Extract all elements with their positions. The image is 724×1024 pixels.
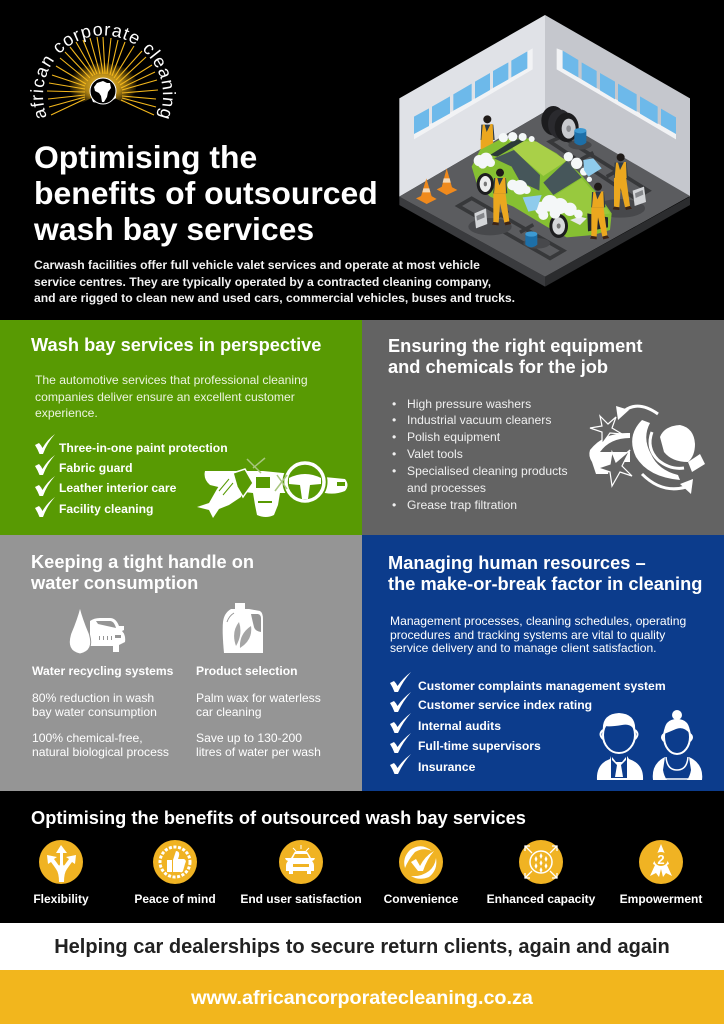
column: product selection: car cleaning: [196, 705, 261, 719]
column: water recycling systems: [32, 664, 173, 759]
label: peace of mind: Peace of mind: [134, 892, 216, 906]
bullet list: Specialised cleaning products: [407, 464, 568, 478]
heading: Keeping a tight handle on: [31, 551, 254, 572]
intro text: [34, 258, 515, 305]
cones: [416, 168, 457, 204]
intro text: service centres. They are typically operated by a contracted cleaning company,: [34, 275, 491, 289]
check list: [35, 434, 228, 517]
icon: end user satisfaction: [279, 840, 323, 884]
icon: polishing machine: [589, 404, 705, 494]
shadows: [468, 140, 645, 249]
title: benefits of outsourced: [34, 175, 378, 211]
illustration: isometric car wash bay: [399, 15, 690, 286]
icon: peace of mind: [153, 840, 197, 884]
icon: eco product bottle: [222, 603, 263, 653]
label: end user satisfaction: End user satisfaction: [240, 892, 362, 906]
bullet list: •: [392, 464, 396, 478]
body text: companies deliver ensure an excellent customer: [35, 390, 295, 404]
icon: hand cleaning dashboard: [197, 458, 348, 518]
floor markings: [458, 137, 648, 258]
title: wash bay services: [34, 211, 314, 247]
panel: right equipment and chemicals: [362, 320, 724, 535]
heading: water consumption: [31, 572, 198, 593]
heading: Optimising the benefits of outsourced wash bay services: [31, 807, 526, 828]
body text: [390, 614, 686, 655]
icon: enhanced capacity: [519, 840, 563, 884]
icon: convenience: [399, 840, 443, 884]
body text: service delivery and to manage client satisfaction.: [390, 641, 657, 655]
worker: front: [590, 183, 609, 239]
body text: The automotive services that professional cleaning: [35, 373, 308, 387]
bullet list: [392, 396, 568, 512]
bucket: [574, 131, 586, 145]
bullet list: Industrial vacuum cleaners: [407, 413, 551, 427]
check list: [390, 672, 666, 774]
intro text: and are rigged to clean new and used cars, commercial vehicles, buses and trucks.: [34, 291, 515, 305]
tyres: [541, 106, 579, 142]
heading: the make-or-break factor in cleaning: [388, 573, 702, 594]
bullet list: •: [392, 498, 396, 512]
machines: [474, 187, 646, 228]
title: [34, 139, 378, 247]
bullet list: Polish equipment: [407, 430, 500, 444]
bullet list: High pressure washers: [407, 396, 531, 410]
icon: empowerment: [639, 840, 683, 884]
check list: Internal audits: [418, 719, 501, 733]
label: enhanced capacity: Enhanced capacity: [487, 892, 595, 906]
bullet list: and processes: [407, 481, 486, 495]
banner: tagline: [0, 923, 724, 970]
body text: procedures and tracking systems are vital to quality: [390, 628, 665, 642]
body text: Management processes, cleaning schedules, operating: [390, 614, 686, 628]
car: [472, 138, 612, 238]
panel: wash bay services in perspective: [0, 320, 362, 535]
column: product selection: Product selection: [196, 664, 297, 678]
heading: and chemicals for the job: [388, 356, 608, 377]
worker: back: [479, 115, 499, 172]
heading: Wash bay services in perspective: [31, 334, 321, 355]
intro text: Carwash facilities offer full vehicle valet services and operate at most vehicle: [34, 258, 480, 272]
right windows: [557, 48, 676, 139]
heading: [31, 551, 254, 593]
body text: experience.: [35, 406, 98, 420]
panel: header: [0, 0, 724, 320]
banner: tagline: Helping car dealerships to secure return clients, again and again: [54, 936, 670, 958]
left windows: [414, 48, 533, 139]
check list: Leather interior care: [59, 481, 176, 495]
label: empowerment: Empowerment: [620, 892, 702, 906]
icon: male and female supervisors: [596, 710, 702, 780]
panel: benefits strip: [0, 791, 724, 923]
check list: Customer complaints management system: [418, 679, 666, 693]
heading: [388, 335, 642, 377]
bullet list: •: [392, 396, 396, 410]
heading: [388, 552, 702, 594]
bullet list: •: [392, 430, 396, 444]
check list: Three-in-one paint protection: [59, 441, 228, 455]
logo: african corporate cleaning: african corporate cleaning: [30, 26, 176, 119]
check list: Fabric guard: [59, 461, 133, 475]
bullet list: Valet tools: [407, 447, 463, 461]
panel: water consumption: [0, 535, 362, 791]
bullet list: •: [392, 413, 396, 427]
worker: right: [613, 153, 632, 210]
column: water recycling systems: natural biological process: [32, 745, 169, 759]
heading: Ensuring the right equipment: [388, 335, 642, 356]
icon: empowerment: 2: [657, 852, 665, 867]
check list: Insurance: [418, 760, 475, 774]
icon: water drop and car: [70, 609, 126, 654]
label: flexibility: Flexibility: [33, 892, 89, 906]
body text: [35, 373, 308, 420]
foam: [474, 132, 592, 220]
title: Optimising the: [34, 139, 257, 175]
check list: Customer service index rating: [418, 698, 592, 712]
icon: flexibility: [39, 840, 83, 884]
label: convenience: Convenience: [384, 892, 458, 906]
check list: Full-time supervisors: [418, 739, 541, 753]
column: product selection: [196, 664, 321, 759]
bullet list: Grease trap filtration: [407, 498, 517, 512]
banner: website: www.africancorporatecleaning.co.za: [191, 987, 533, 1009]
column: product selection: Palm wax for waterless: [196, 691, 321, 705]
column: product selection: litres of water per wash: [196, 745, 321, 759]
column: water recycling systems: 100% chemical-free,: [32, 731, 143, 745]
check list: Facility cleaning: [59, 502, 153, 516]
bullet list: •: [392, 447, 396, 461]
panel: managing human resources: [362, 535, 724, 791]
banner: website: [0, 970, 724, 1024]
column: product selection: Save up to 130-200: [196, 731, 302, 745]
worker: left front: [492, 169, 511, 225]
heading: Managing human resources –: [388, 552, 646, 573]
column: water recycling systems: Water recycling systems: [32, 664, 173, 678]
column: water recycling systems: bay water consumption: [32, 705, 157, 719]
column: water recycling systems: 80% reduction in wash: [32, 691, 154, 705]
